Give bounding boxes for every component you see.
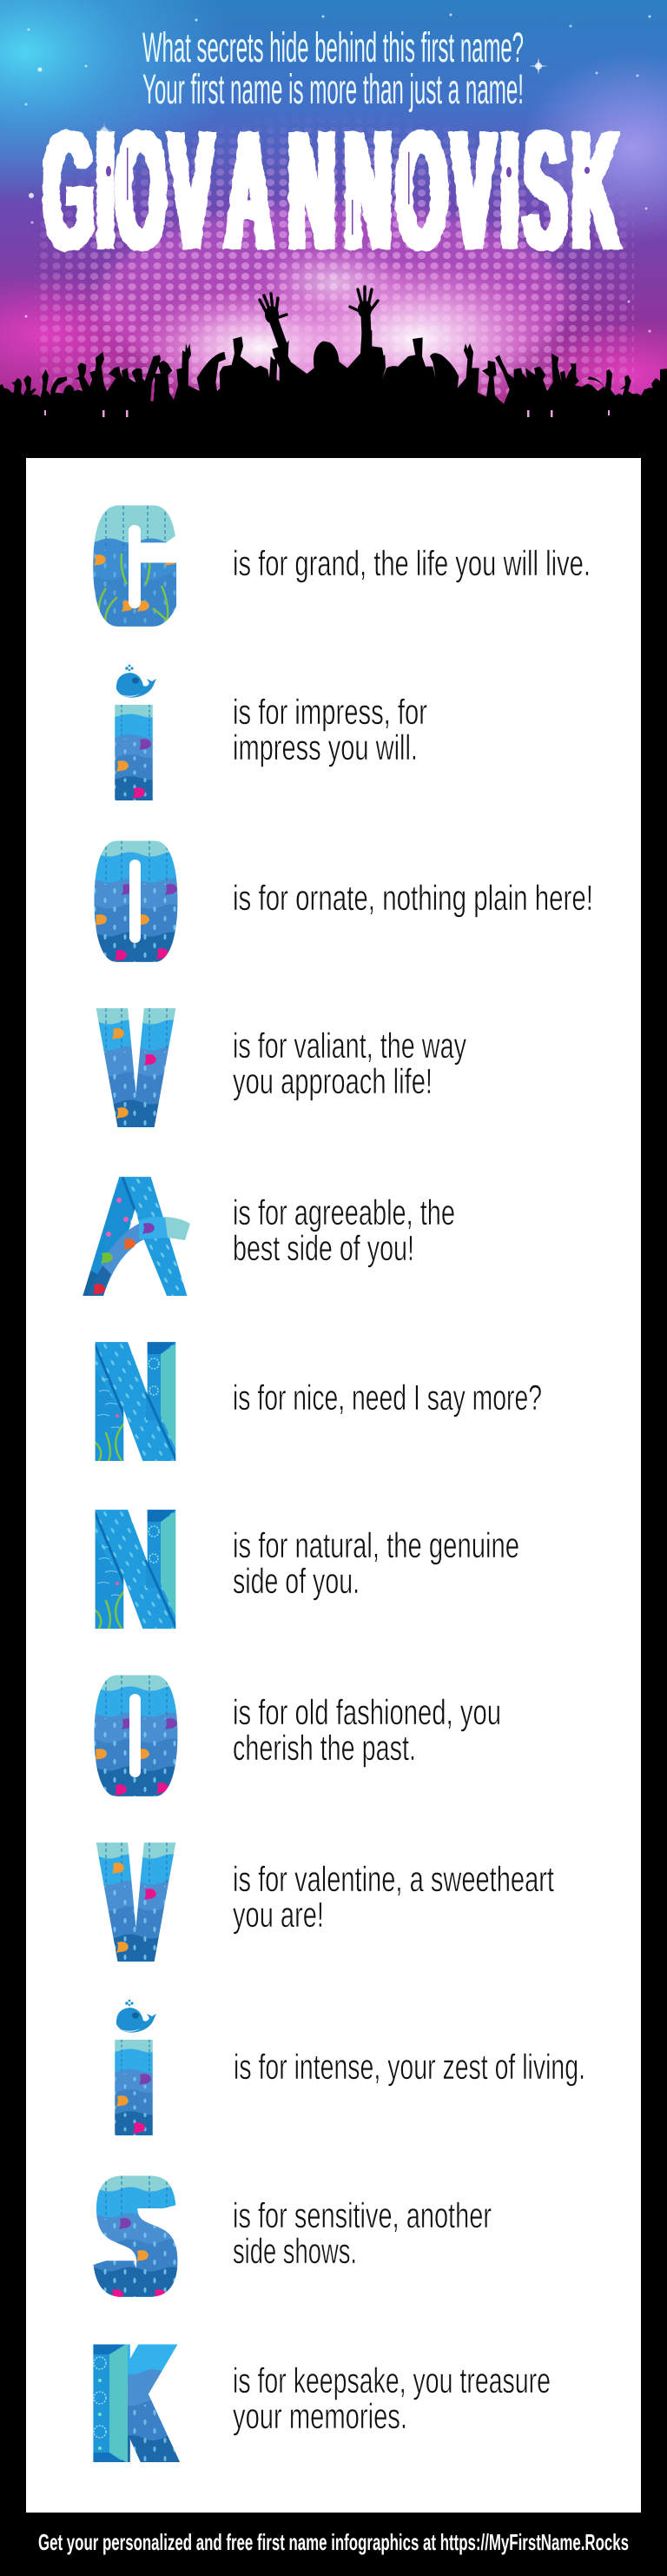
text xyxy=(233,2360,551,2436)
header banner xyxy=(0,0,667,426)
text: best side of you! xyxy=(233,1228,414,1268)
crowd gaps xyxy=(44,410,610,417)
subtitle text xyxy=(142,25,524,113)
text: is for old fashioned, you xyxy=(233,1692,501,1732)
row: O xyxy=(94,841,591,962)
letter V xyxy=(96,1842,175,1962)
text: impress you will. xyxy=(233,727,418,767)
white content panel xyxy=(26,458,641,2513)
letter A xyxy=(83,1177,190,1296)
icon: whale xyxy=(116,665,156,698)
text: is for valiant, the way xyxy=(233,1026,466,1066)
text xyxy=(233,1192,455,1268)
text xyxy=(233,1026,466,1101)
raised hero hands xyxy=(260,287,378,344)
text: you approach life! xyxy=(233,1061,433,1101)
crowd silhouette xyxy=(0,287,667,461)
text: is for sensitive, another xyxy=(233,2195,492,2235)
text xyxy=(233,1525,519,1601)
row: V xyxy=(96,1008,466,1127)
row: S xyxy=(94,2176,492,2297)
text: is for agreeable, the xyxy=(233,1192,455,1232)
row: I xyxy=(115,664,427,800)
left crowd xyxy=(0,336,340,426)
text: you are! xyxy=(233,1895,324,1935)
text xyxy=(233,1859,554,1935)
text: side shows. xyxy=(233,2231,357,2271)
text xyxy=(233,2195,492,2271)
letter N xyxy=(96,1342,175,1461)
letter I xyxy=(115,704,153,800)
row: G xyxy=(93,506,589,627)
letter K xyxy=(93,2345,181,2462)
sparkles xyxy=(24,14,651,332)
letter G xyxy=(93,506,177,627)
text: is for natural, the genuine xyxy=(233,1525,519,1565)
row: N xyxy=(87,1508,519,1634)
right crowd xyxy=(329,330,667,426)
text xyxy=(233,692,427,767)
text: side of you. xyxy=(233,1561,360,1601)
letter V xyxy=(96,1008,175,1127)
text: your memories. xyxy=(233,2396,407,2436)
text: is for impress, for xyxy=(233,692,427,732)
text xyxy=(233,1692,501,1768)
letter S xyxy=(94,2176,177,2297)
row: V xyxy=(96,1842,554,1962)
text: is for nice, need I say more? xyxy=(233,1378,542,1417)
row: N xyxy=(87,1340,542,1466)
text: cherish the past. xyxy=(233,1728,416,1768)
row: O xyxy=(94,1676,500,1796)
row: K xyxy=(78,2342,551,2468)
letter I xyxy=(115,2039,153,2135)
letter O xyxy=(94,1676,177,1796)
letter N xyxy=(96,1510,175,1629)
title distress marks xyxy=(106,148,590,235)
row: I xyxy=(78,2000,585,2140)
row: A xyxy=(69,1175,455,1301)
icon: whale xyxy=(116,2000,156,2033)
title: GIOVANNOVISK xyxy=(43,96,618,285)
letter O xyxy=(94,841,177,962)
